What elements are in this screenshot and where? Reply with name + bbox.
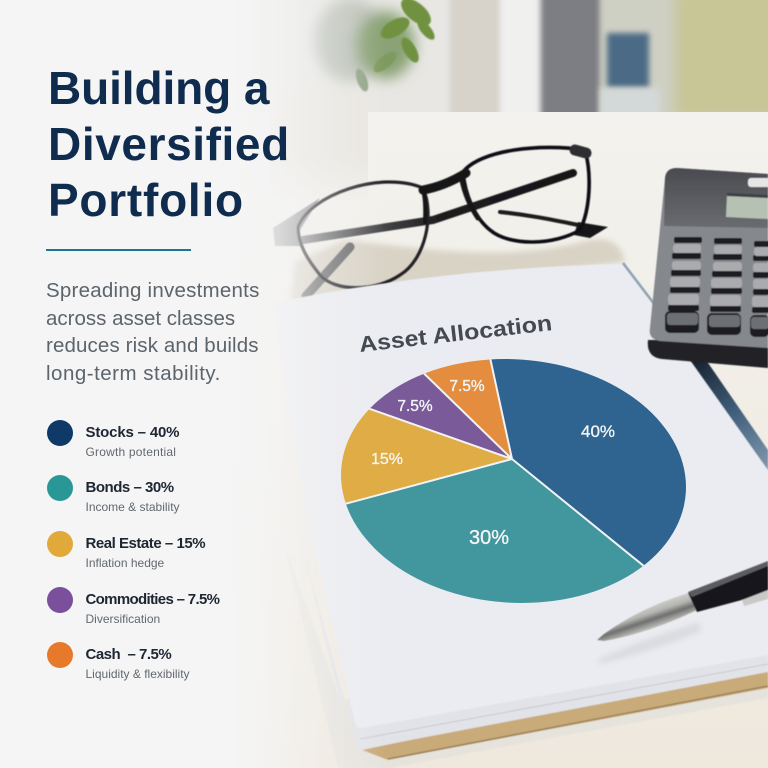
legend: commodities [47, 587, 220, 626]
legend: bonds: Income & stability [86, 500, 180, 514]
pie labels [371, 378, 615, 549]
wall and window backdrop [0, 0, 768, 130]
intro text [46, 279, 260, 384]
slice: commodities 7.5% [370, 374, 508, 456]
legend: bonds: Bonds – 30% [86, 479, 174, 496]
legend: bonds [47, 475, 180, 514]
title [48, 62, 290, 226]
pie labels: 7.5% [397, 398, 433, 415]
heading: Asset Allocation: Asset Allocation [358, 310, 553, 357]
title: Portfolio [48, 174, 244, 226]
legend: cash: Cash – 7.5% [86, 646, 171, 663]
glasses shadow on desk [290, 239, 625, 305]
icon: eyeglasses [273, 147, 608, 296]
legend: stocks [47, 420, 180, 458]
legend: real estate: Inflation hedge [86, 556, 164, 570]
slice: real estate 15% [341, 409, 508, 504]
calculator [648, 168, 768, 368]
pen shadow [597, 622, 700, 664]
intro text: Spreading investments [46, 279, 260, 302]
legend: stocks: Growth potential [86, 444, 176, 458]
pie labels: 7.5% [449, 378, 485, 395]
icon: pen [597, 561, 768, 641]
slice: bonds 30% [346, 460, 644, 603]
pie chart: asset allocation [341, 359, 686, 603]
slice: stocks 40% [490, 359, 686, 566]
pie labels: 40% [581, 422, 615, 441]
slice: cash 7.5% [424, 360, 510, 456]
legend: commodities: Diversification [86, 612, 160, 626]
binder band beside page [623, 263, 768, 470]
title: Diversified [48, 118, 290, 170]
legend: stocks: Stocks – 40% [86, 424, 179, 440]
intro text: across asset classes [46, 306, 235, 330]
notebook stack [273, 264, 768, 768]
legend: real estate [47, 531, 206, 570]
vase and plant [270, 0, 438, 200]
legend: commodities: Commodities – 7.5% [86, 591, 219, 608]
legend: real estate: Real Estate – 15% [86, 535, 205, 552]
legend: cash [47, 642, 190, 681]
left white fade [0, 0, 385, 768]
title: Building a [48, 62, 269, 114]
pie labels: 30% [469, 527, 509, 549]
pie labels: 15% [371, 451, 403, 468]
intro text: reduces risk and builds [46, 334, 259, 357]
intro text: long-term stability. [46, 362, 221, 384]
legend: cash: Liquidity & flexibility [86, 667, 190, 681]
background photo scene [273, 0, 768, 768]
